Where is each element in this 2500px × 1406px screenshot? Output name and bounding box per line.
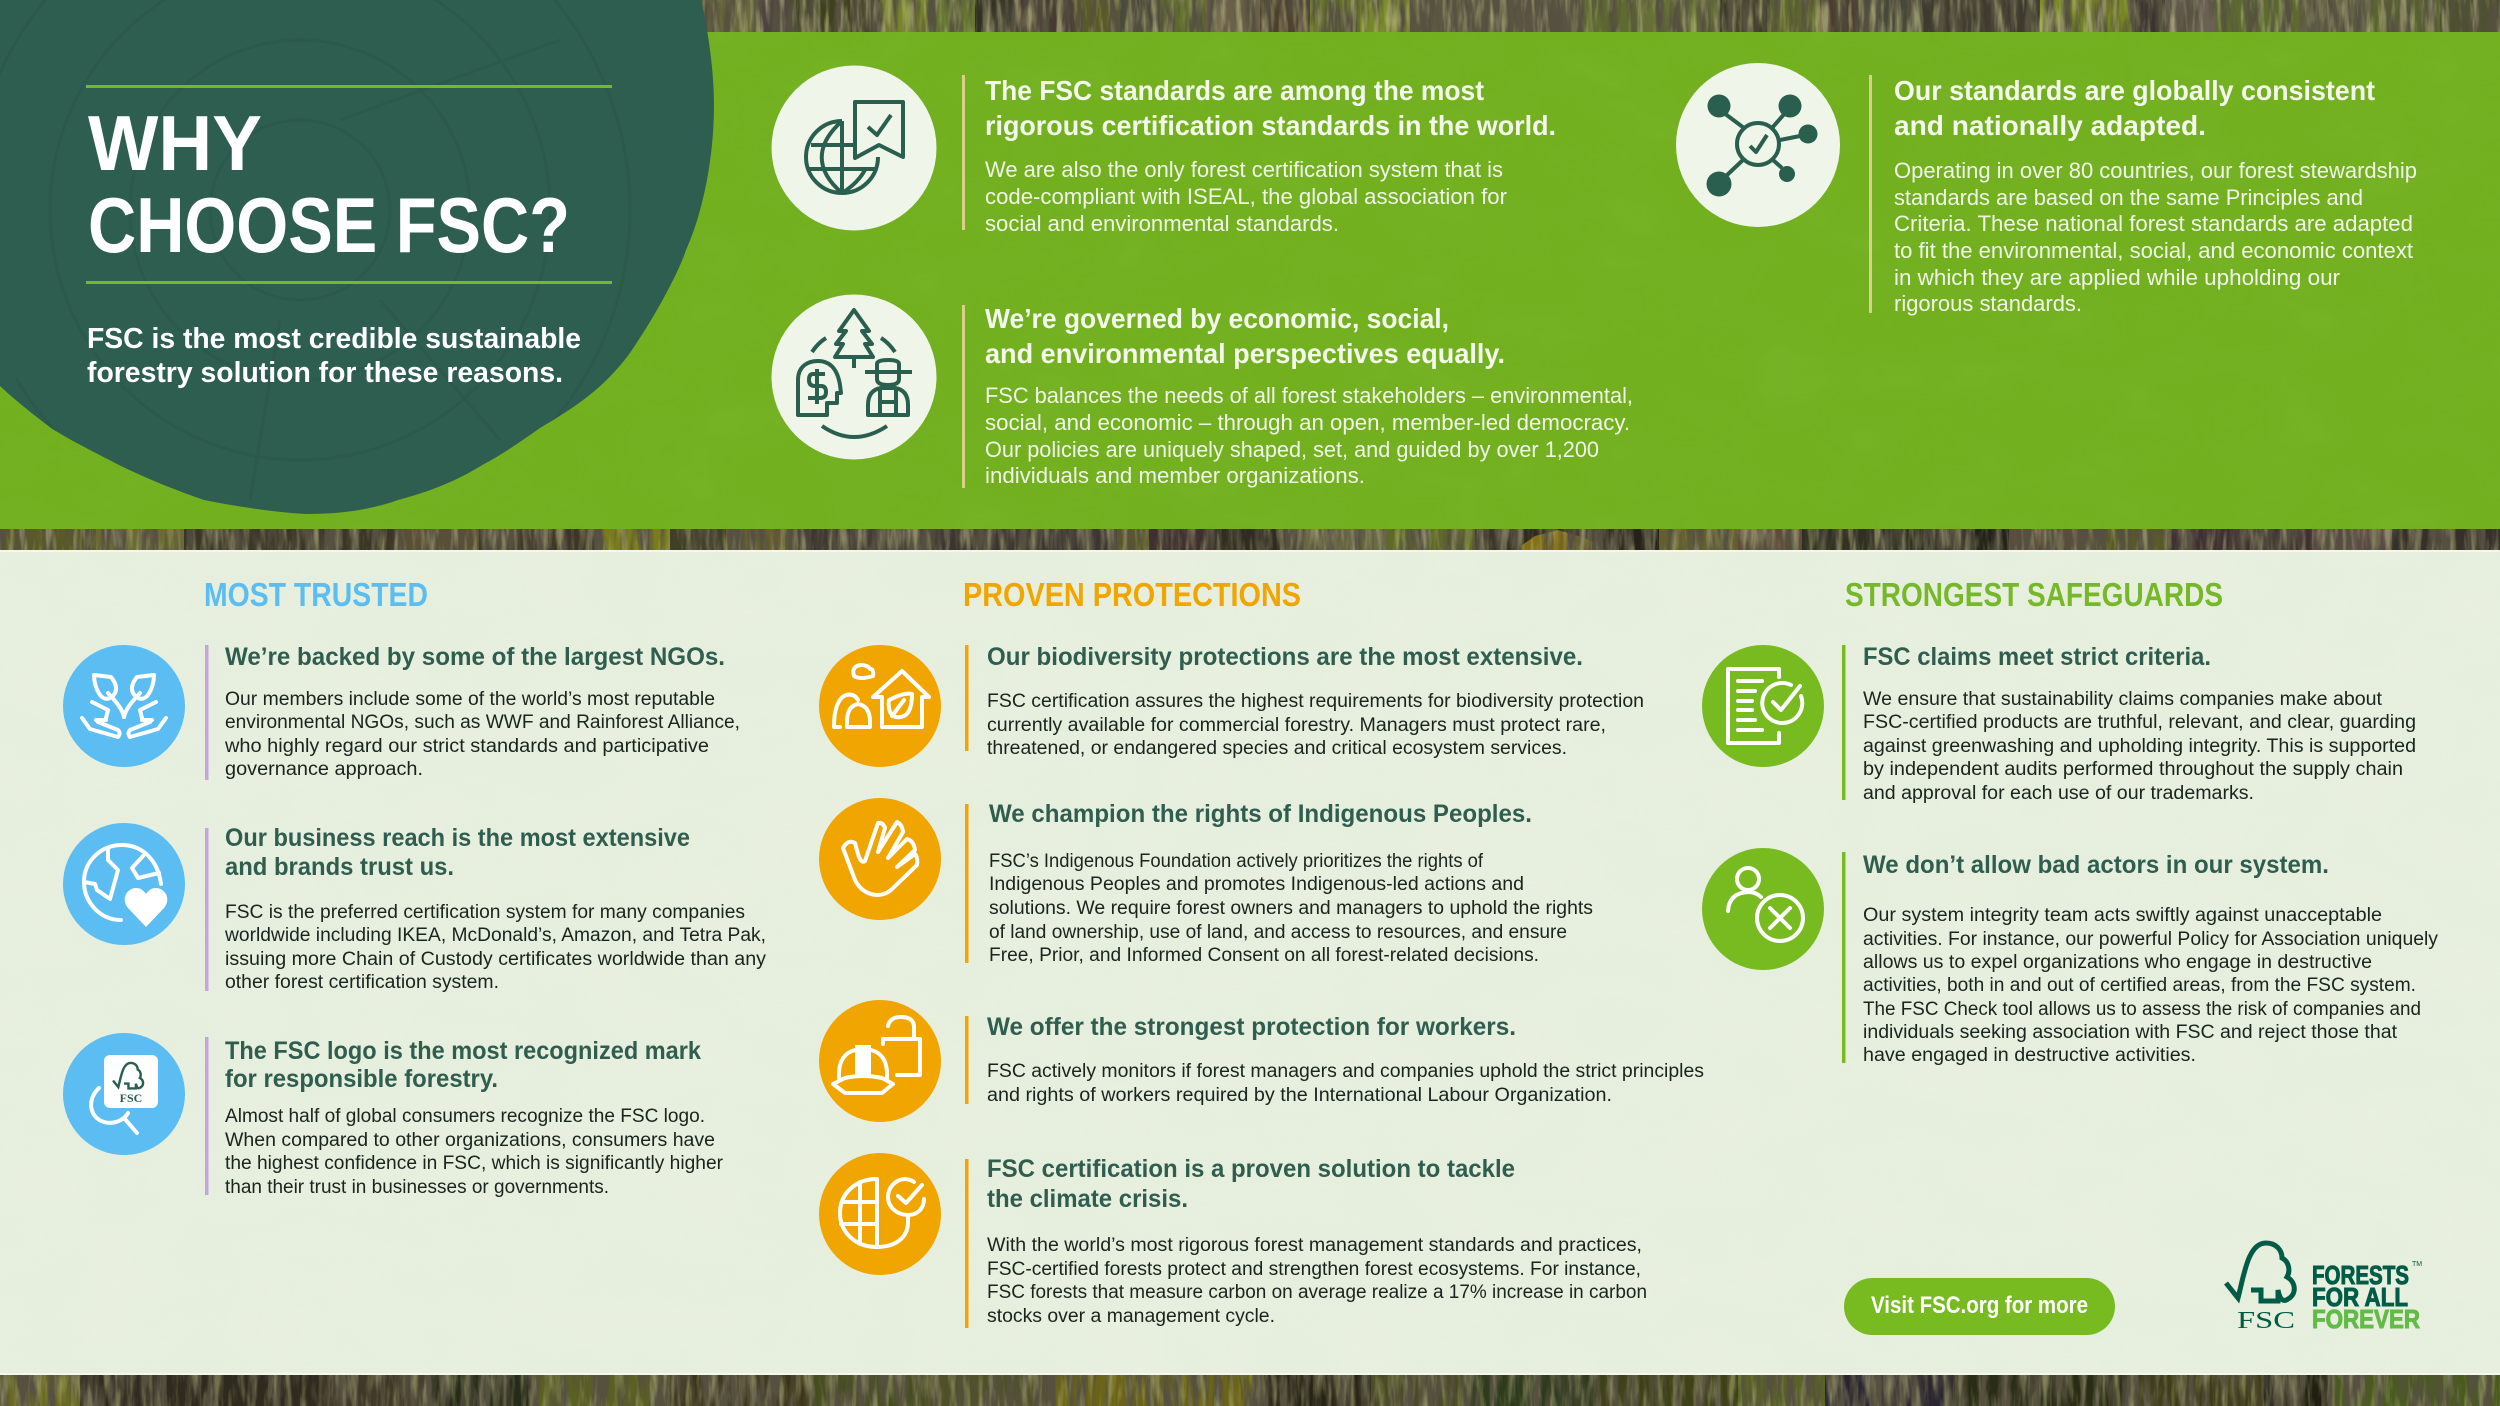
item: backed by NGOs	[63, 643, 740, 780]
heading: proven protections: PROVEN PROTECTIONS	[963, 576, 1301, 613]
text: FSC logo recognition: The FSC logo is the most recognized mark	[225, 1037, 701, 1065]
icon: earth with heart	[63, 823, 185, 945]
item: climate crisis	[819, 1153, 1647, 1328]
logo: FSC forests for all forever: FOREVER	[2312, 1304, 2420, 1334]
icon: habitat house with leaf	[819, 645, 941, 767]
text: backed by NGOs: environmental NGOs, such as WWF and Rainforest Alliance,	[225, 712, 740, 733]
text: governance: social, and economic – through an open, member-led democracy.	[985, 410, 1630, 435]
text: climate crisis: the climate crisis.	[987, 1185, 1188, 1213]
item: bad actors	[1702, 848, 2439, 1066]
panel: green top panel	[0, 32, 2500, 529]
text: workers: FSC actively monitors if forest managers and companies uphold the strict principles	[987, 1061, 1704, 1082]
text: bad actors: The FSC Check tool allows us to assess the risk of companies and	[1863, 999, 2421, 1020]
text: bad actors: activities, both in and out of certified areas, from the FSC system.	[1863, 975, 2416, 996]
text: indigenous peoples: solutions. We require forest owners and managers to uphold the rights	[989, 898, 1593, 919]
item: FSC logo recognition	[63, 1033, 724, 1198]
text: indigenous peoples: Free, Prior, and Informed Consent on all forest-related decisions.	[989, 945, 1539, 966]
text: business reach: issuing more Chain of Custody certificates worldwide than any	[225, 949, 767, 970]
text: bad actors: activities. For instance, our powerful Policy for Association uniquely	[1863, 929, 2439, 950]
text: business reach	[224, 824, 767, 993]
text: globally consistent: Criteria. These national forest standards are adapted	[1894, 211, 2413, 236]
text: FSC logo recognition: When compared to other organizations, consumers have	[225, 1130, 715, 1151]
text: claims criteria	[1863, 643, 2416, 804]
forest photo band: bottom	[0, 1375, 2500, 1406]
text: bad actors: have engaged in destructive activities.	[1863, 1045, 2196, 1066]
text: workers: and rights of workers required by the International Labour Organization.	[987, 1085, 1612, 1106]
icon: globe with check flag	[772, 66, 936, 230]
icon: FSC checkmark tree	[2226, 1243, 2294, 1301]
logo: FSC forests for all forever: FSC	[2237, 1308, 2295, 1334]
panel: dark green tree-ring title blob	[0, 0, 714, 540]
forest photo band: middle	[0, 528, 2500, 550]
icon: hard hat and open lock	[819, 1000, 941, 1122]
text: rigorous standards: We are also the only forest certification system that is	[985, 157, 1503, 182]
text: globally consistent: to fit the environmental, social, and economic context	[1894, 238, 2413, 263]
text: FSC logo recognition: the highest confidence in FSC, which is significantly higher	[225, 1153, 724, 1174]
text: FSC logo recognition	[225, 1037, 724, 1198]
text: bad actors: We don’t allow bad actors in our system.	[1863, 851, 2329, 879]
text: globally consistent: rigorous standards.	[1894, 291, 2082, 316]
icon: FSC logo under magnifier: FSC	[120, 1091, 142, 1105]
text: FSC logo recognition: than their trust in businesses or governments.	[225, 1177, 609, 1198]
text: business reach: other forest certification system.	[225, 972, 499, 993]
item: workers	[819, 1000, 1704, 1122]
title: why choose fsc: WHY	[88, 99, 262, 187]
icon: document with check	[1702, 645, 1824, 767]
icon: network with check	[1676, 63, 1840, 227]
text: indigenous peoples: of land ownership, use of land, and access to resources, and ensure	[989, 922, 1567, 943]
subtitle: FSC is the most credible sustainable	[87, 323, 581, 355]
text: claims criteria: FSC-certified products are truthful, relevant, and clear, guarding	[1863, 712, 2416, 733]
text: rigorous standards: code-compliant with ISEAL, the global association for	[985, 184, 1507, 209]
text: business reach: Our business reach is the most extensive	[225, 824, 690, 852]
title: why choose fsc: CHOOSE FSC?	[88, 181, 570, 269]
text: bad actors	[1863, 851, 2439, 1066]
text: bad actors: Our system integrity team acts swiftly against unacceptable	[1863, 905, 2382, 926]
text: climate crisis: FSC forests that measure carbon on average realize a 17% increase in carbon	[987, 1282, 1647, 1303]
text: governance: Our policies are uniquely shaped, set, and guided by over 1,200	[985, 437, 1599, 462]
text: rigorous standards: rigorous certification standards in the world.	[985, 110, 1556, 141]
text: rigorous standards: The FSC standards are among the most	[985, 75, 1484, 106]
logo: FSC forests for all forever: TM	[2412, 1261, 2422, 1268]
text: indigenous peoples: Indigenous Peoples and promotes Indigenous-led actions and	[989, 874, 1524, 895]
icon: FSC logo under magnifier	[63, 1033, 185, 1155]
text: rigorous standards	[985, 75, 1556, 236]
text: globally consistent: Operating in over 80 countries, our forest stewardship	[1894, 158, 2417, 183]
text: bad actors: allows us to expel organizations who engage in destructive	[1863, 952, 2372, 973]
text: climate crisis	[987, 1155, 1647, 1327]
text: globally consistent: standards are based on the same Principles and	[1894, 185, 2363, 210]
subtitle: forestry solution for these reasons.	[87, 357, 563, 389]
item: governance	[772, 294, 1633, 488]
icon: tree, economy head and forester	[772, 294, 936, 460]
item: rigorous standards	[772, 66, 1556, 236]
text: governance: We’re governed by economic, social,	[985, 303, 1449, 334]
text: indigenous peoples	[989, 800, 1593, 966]
title block	[86, 85, 612, 389]
button: visit FSC.org: Visit FSC.org for more	[1871, 1292, 2088, 1319]
text: backed by NGOs: Our members include some of the world’s most reputable	[225, 689, 715, 710]
icon: globe with check	[819, 1153, 941, 1275]
subtitle	[87, 323, 581, 389]
forest photo band: top	[600, 0, 2500, 32]
text: claims criteria: We ensure that sustainability claims companies make about	[1863, 689, 2383, 710]
text: governance: and environmental perspectives equally.	[985, 338, 1505, 369]
text: globally consistent: and nationally adapted.	[1894, 110, 2206, 141]
heading: strongest safeguards: STRONGEST SAFEGUARDS	[1845, 576, 2223, 613]
text: governance: FSC balances the needs of all forest stakeholders – environmental,	[985, 383, 1633, 408]
text: climate crisis: FSC-certified forests protect and strengthen forest ecosystems. For instance,	[987, 1259, 1641, 1280]
text: globally consistent: in which they are applied while upholding our	[1894, 265, 2340, 290]
icon: person with X	[1702, 848, 1824, 970]
text: backed by NGOs: governance approach.	[225, 759, 423, 780]
text: globally consistent: Our standards are globally consistent	[1894, 75, 2375, 106]
text: governance: individuals and member organizations.	[985, 463, 1365, 488]
text: workers: We offer the strongest protection for workers.	[987, 1013, 1516, 1041]
text: climate crisis: With the world’s most rigorous forest management standards and practices,	[987, 1235, 1642, 1256]
item: claims criteria	[1702, 643, 2416, 804]
logo: FSC forests for all forever	[2226, 1243, 2422, 1334]
text: backed by NGOs: We’re backed by some of the largest NGOs.	[225, 643, 725, 671]
button: visit FSC.org	[1844, 1278, 2115, 1335]
text: business reach: worldwide including IKEA, McDonald’s, Amazon, and Tetra Pak,	[224, 925, 766, 946]
text: biodiversity: currently available for commercial forestry. Managers must protect rare,	[987, 715, 1606, 736]
text: indigenous peoples: We champion the rights of Indigenous Peoples.	[989, 800, 1532, 828]
text: claims criteria: FSC claims meet strict criteria.	[1863, 643, 2211, 671]
text: governance	[985, 303, 1633, 488]
text: backed by NGOs	[224, 643, 740, 780]
logo: FSC forests for all forever: FOR ALL	[2312, 1282, 2408, 1312]
title: why choose fsc	[88, 99, 570, 269]
text: climate crisis: FSC certification is a proven solution to tackle	[987, 1155, 1515, 1183]
text: biodiversity: FSC certification assures the highest requirements for biodiversity protection	[987, 691, 1644, 712]
text: globally consistent	[1894, 75, 2417, 316]
text: claims criteria: and approval for each use of our trademarks.	[1863, 783, 2254, 804]
text: FSC logo recognition: Almost half of global consumers recognize the FSC logo.	[225, 1106, 705, 1127]
icon: raised hand	[819, 798, 941, 920]
text: biodiversity: Our biodiversity protections are the most extensive.	[987, 643, 1583, 671]
text: claims criteria: by independent audits performed throughout the supply chain	[1863, 759, 2403, 780]
item: business reach	[63, 823, 767, 993]
text: business reach: FSC is the preferred certification system for many companies	[225, 902, 745, 923]
item: globally consistent	[1676, 63, 2417, 316]
text: FSC logo recognition: for responsible forestry.	[225, 1065, 498, 1093]
panel: light lower panel	[0, 550, 2500, 1375]
text: claims criteria: against greenwashing and upholding integrity. This is supported	[1863, 736, 2416, 757]
text: bad actors: individuals seeking association with FSC and reject those that	[1863, 1022, 2398, 1043]
text: indigenous peoples: FSC’s Indigenous Foundation actively prioritizes the rights of	[989, 851, 1484, 872]
text: rigorous standards: social and environmental standards.	[985, 211, 1339, 236]
logo: FSC forests for all forever: FORESTS	[2312, 1260, 2409, 1290]
text: biodiversity: threatened, or endangered species and critical ecosystem services.	[987, 738, 1567, 759]
item: biodiversity	[819, 643, 1644, 767]
text: backed by NGOs: who highly regard our strict standards and participative	[224, 736, 709, 757]
text: climate crisis: stocks over a management cycle.	[987, 1306, 1275, 1327]
text: biodiversity	[987, 643, 1644, 759]
heading: most trusted: MOST TRUSTED	[204, 576, 428, 613]
item: indigenous peoples	[819, 798, 1593, 966]
text: business reach: and brands trust us.	[225, 853, 454, 881]
icon: hands holding seedling	[63, 645, 185, 767]
text: workers	[987, 1013, 1704, 1106]
